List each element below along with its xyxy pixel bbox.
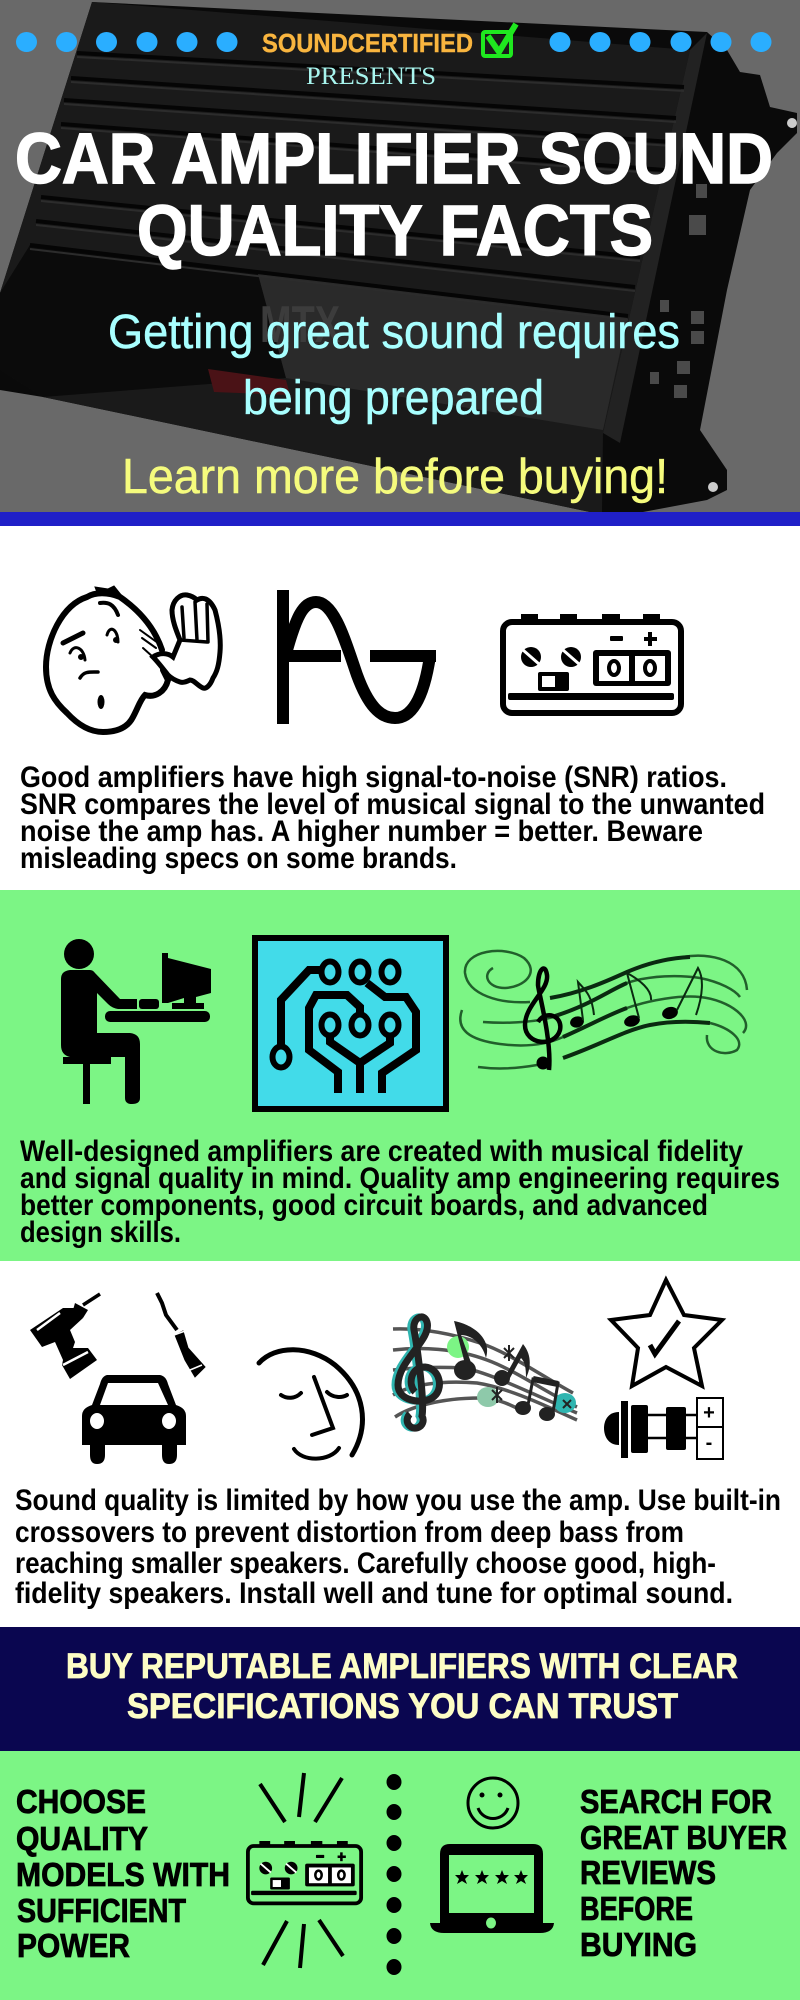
icon: smiley xyxy=(468,1778,518,1828)
text: search for reviews xyxy=(580,1783,787,1963)
presents label: PRESENTS xyxy=(306,63,436,90)
title xyxy=(15,120,773,271)
text: choose quality: QUALITY xyxy=(16,1820,148,1857)
banner: buy reputable: BUY REPUTABLE AMPLIFIERS WITH CLEAR xyxy=(66,1647,738,1686)
text: choose quality: CHOOSE xyxy=(16,1783,146,1820)
panel: design quality xyxy=(0,890,800,1261)
panel: signal to noise xyxy=(0,526,800,890)
body text: usage: crossovers to prevent distortion from deep bass from xyxy=(15,1516,684,1549)
panel: buying tips xyxy=(0,1751,800,2000)
icon: person at computer xyxy=(61,939,211,1104)
banner: buy reputable xyxy=(0,1627,800,1751)
subtitle xyxy=(108,306,680,425)
icon: green check box xyxy=(483,24,516,56)
icon: flowing music staff xyxy=(460,951,747,1070)
icon: content face xyxy=(259,1350,362,1459)
decorative dots left xyxy=(16,32,238,52)
text: choose quality: POWER xyxy=(17,1927,130,1964)
icon: speaker with terminals xyxy=(604,1398,723,1459)
text: search for reviews: SEARCH FOR xyxy=(580,1783,772,1820)
body text: SNR: misleading specs on some brands. xyxy=(20,842,457,875)
body text: SNR: Good amplifiers have high signal-to-noise (SNR) ratios. xyxy=(20,761,727,794)
subtitle: being prepared xyxy=(243,372,544,425)
icon: colorful music notes xyxy=(393,1317,577,1428)
call to learn more: Learn more before buying! xyxy=(122,450,668,504)
icon: screwdriver xyxy=(157,1293,205,1377)
amplifier photo background xyxy=(0,2,797,512)
body text: SNR xyxy=(20,761,765,875)
blue band xyxy=(0,512,800,526)
icon: amplifier xyxy=(503,614,681,713)
icon: sine wave xyxy=(277,590,436,724)
body text: usage: fidelity speakers. Install well and tune for optimal sound. xyxy=(15,1577,733,1610)
text: choose quality: MODELS WITH xyxy=(16,1856,230,1893)
decorative dots right xyxy=(550,32,772,52)
icon: drill xyxy=(30,1294,100,1379)
dotted divider xyxy=(386,1774,402,1975)
icon: speaker with terminals: - xyxy=(706,1432,712,1454)
body text: usage xyxy=(15,1484,781,1610)
body text: design: design skills. xyxy=(20,1216,181,1249)
text: search for reviews: BUYING xyxy=(580,1926,697,1963)
icon: speaker with terminals: + xyxy=(703,1402,715,1424)
text: choose quality xyxy=(16,1783,230,1964)
body text: usage: reaching smaller speakers. Carefully choose good, high- xyxy=(15,1547,716,1580)
text: search for reviews: REVIEWS xyxy=(580,1854,716,1891)
panel: usage xyxy=(0,1261,800,1627)
brand name: SOUNDCERTIFIED xyxy=(262,28,473,58)
subtitle: Getting great sound requires xyxy=(108,306,680,359)
title: QUALITY FACTS xyxy=(137,192,653,271)
icon: listening face xyxy=(46,586,220,732)
body text: design xyxy=(20,1135,780,1249)
body text: design: better components, good circuit boards, and advanced xyxy=(20,1189,708,1222)
icon: circuit board xyxy=(255,938,446,1109)
icon: car xyxy=(82,1375,186,1464)
icon: amplifier with rays xyxy=(248,1773,361,1968)
banner: buy reputable: SPECIFICATIONS YOU CAN TRUST xyxy=(127,1687,678,1726)
text: search for reviews: BEFORE xyxy=(580,1890,693,1927)
body text: SNR: noise the amp has. A higher number = better. Beware xyxy=(20,815,703,848)
text: choose quality: SUFFICIENT xyxy=(17,1892,186,1929)
amplifier photo background: MTX xyxy=(260,296,340,354)
icon: laptop with stars xyxy=(430,1844,554,1933)
header panel xyxy=(0,0,800,513)
icon: star with check xyxy=(611,1280,722,1386)
